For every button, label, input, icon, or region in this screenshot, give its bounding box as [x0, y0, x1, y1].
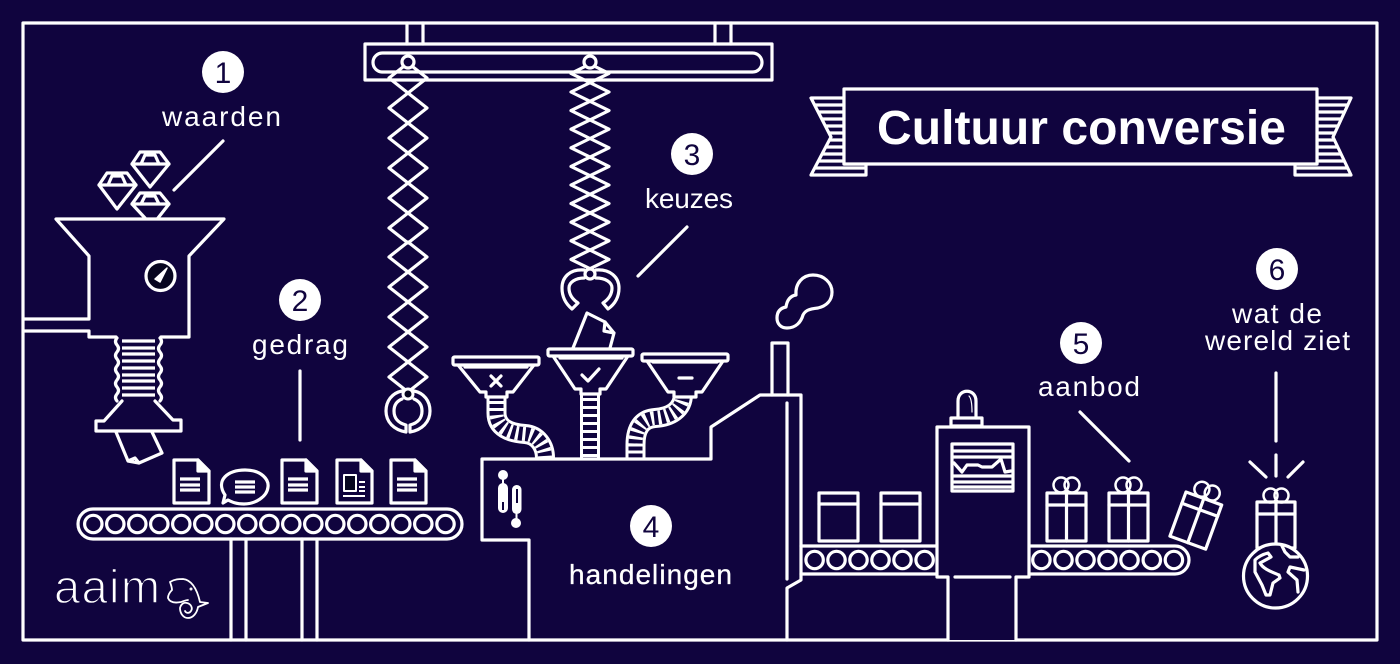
claw pivot: [585, 269, 595, 279]
step 2: [252, 279, 348, 440]
wordmark: aaim: [54, 560, 160, 613]
number 2: [279, 279, 321, 321]
pipe right: [636, 394, 683, 458]
icon: elephant: [168, 579, 208, 618]
smoke cloud: [777, 275, 832, 328]
label handelingen: handelingen: [569, 559, 732, 590]
tilted gift: [1170, 477, 1227, 549]
gift 1: [1047, 478, 1086, 541]
document 2: [282, 460, 317, 503]
gem left: [99, 173, 136, 209]
gift on globe: [1244, 455, 1308, 608]
crane beam: [365, 44, 772, 80]
icon: minus: [679, 376, 692, 380]
number 4: 4: [643, 511, 659, 544]
number 3: [671, 133, 713, 175]
globe: [1244, 544, 1308, 608]
speech bubble: [222, 470, 268, 504]
gift on top: [1257, 488, 1295, 548]
pivot 1: [402, 56, 414, 68]
label wat de wereld ziet: wereld ziet: [1204, 325, 1350, 356]
aaim logo: [54, 560, 208, 618]
belt left section: [801, 546, 937, 574]
number 6: [1256, 248, 1298, 290]
left conveyor: [78, 509, 462, 640]
crane posts: [407, 23, 731, 44]
number 2: 2: [292, 285, 308, 318]
icon: cross: [491, 376, 501, 386]
gem top: [132, 152, 169, 187]
gripper pivot: [403, 389, 413, 399]
label keuzes: keuzes: [645, 183, 733, 214]
round gripper: [386, 391, 430, 432]
machine body: [482, 395, 801, 640]
crane slot: [373, 53, 762, 72]
label gedrag: gedrag: [252, 329, 348, 360]
chimney: [772, 343, 788, 395]
continents: [1255, 546, 1304, 595]
pipe left: [496, 394, 545, 458]
step 3: [638, 133, 733, 276]
pivot 2: [584, 56, 596, 68]
open claw: [562, 270, 619, 309]
funnel machine with gems: [24, 152, 224, 463]
number 6: 6: [1269, 254, 1285, 287]
label wat de wereld ziet: wat de: [1231, 298, 1322, 329]
number 4: [630, 505, 672, 547]
wrapping machine: [937, 391, 1029, 640]
scissor arm 1: [389, 63, 427, 392]
central machine: [482, 275, 832, 640]
title banner: [805, 89, 1356, 175]
leader line 1: [174, 141, 223, 190]
rollers: [85, 515, 454, 533]
ballot paper: [573, 313, 614, 348]
gift 2: [1109, 478, 1148, 541]
belt: [78, 509, 462, 539]
belt right section: [1029, 546, 1189, 574]
gauge: [146, 262, 175, 290]
unwrapped box 2: [881, 493, 920, 541]
leader line 6: [1274, 373, 1278, 441]
hopper neutral: [642, 354, 728, 397]
document 1: [174, 460, 209, 503]
label wat de wereld ziet: [1204, 298, 1350, 356]
funnel body: [24, 219, 224, 337]
monitor graph: [954, 459, 1011, 472]
machine slot: [955, 575, 1010, 579]
number 1: 1: [215, 57, 231, 90]
number 5: 5: [1073, 328, 1089, 361]
lamp: [951, 391, 982, 426]
document with image: [337, 460, 372, 503]
leader line 3: [638, 227, 687, 276]
banner right ribbon tail: [1290, 98, 1356, 175]
banner plate: [844, 89, 1317, 164]
pipe middle: [580, 392, 600, 458]
wrapping machine body: [937, 427, 1029, 640]
legs: [231, 539, 317, 640]
number 3: 3: [684, 139, 700, 172]
document icons: [174, 460, 426, 504]
overhead crane: [365, 23, 772, 432]
rollers: [806, 551, 1183, 569]
label waarden: waarden: [161, 101, 281, 132]
gem in funnel: [132, 193, 169, 218]
machine inner line: [785, 403, 789, 579]
paper leaving outlet: [116, 432, 162, 463]
label aanbod: aanbod: [1038, 371, 1140, 402]
unwrapped box 1: [819, 493, 858, 541]
hopper reject: [453, 357, 539, 397]
hoppers and pipes: [453, 313, 728, 458]
bellows: [116, 338, 162, 401]
banner left ribbon tail: [805, 98, 870, 175]
monitor: [952, 444, 1013, 491]
hopper accept: [548, 349, 633, 394]
scissor arm 2: [571, 64, 609, 269]
levers: [498, 470, 522, 528]
leader line 2: [298, 371, 302, 440]
funnel outlet: [96, 401, 181, 431]
icon: check: [582, 369, 599, 381]
title: Cultuur conversie: [877, 102, 1286, 155]
right conveyor line: [801, 546, 1189, 574]
shine rays: [1250, 455, 1303, 477]
leader line 5: [1080, 412, 1129, 461]
document 3: [391, 460, 426, 503]
step 6: [1204, 248, 1350, 441]
step 5: [1038, 322, 1140, 461]
step 1: [161, 51, 281, 190]
